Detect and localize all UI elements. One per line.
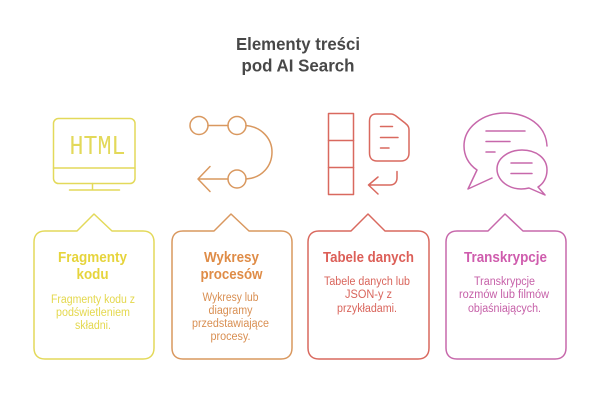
heading: Transkrypcje: Transkrypcje (464, 250, 547, 266)
text: Fragmenty kodu description: składni. (75, 320, 111, 332)
panel: Fragmenty kodu (34, 214, 154, 359)
heading: Wykresy procesów (200, 250, 263, 283)
text: Transkrypcje description: objaśniających. (468, 303, 541, 315)
heading: Fragmenty kodu (58, 250, 127, 283)
text: Transkrypcje description: rozmów lub filmów (459, 289, 550, 301)
heading: Fragmenty kodu: kodu (76, 267, 108, 283)
icon: chat bubbles (464, 113, 547, 195)
text: Transkrypcje description: Transkrypcje (474, 276, 535, 288)
title: Elementy treści (236, 34, 360, 54)
text: Wykresy procesów description (192, 292, 269, 343)
text: Fragmenty kodu description: Fragmenty kodu z (51, 294, 135, 306)
heading: Fragmenty kodu: Fragmenty (58, 250, 127, 266)
text: Tabele danych description: Tabele danych lub (324, 276, 410, 288)
text: Tabele danych description: przykładami. (337, 303, 397, 315)
text: Wykresy procesów description: przedstawiające (192, 318, 269, 330)
panel: Wykresy procesów (172, 214, 292, 359)
text: Tabele danych description: JSON-y z (345, 289, 392, 301)
icon: HTML monitor (54, 118, 135, 190)
text: Wykresy procesów description: procesy. (210, 331, 250, 343)
heading: Tabele danych: Tabele danych (323, 250, 414, 266)
icon: process flow (190, 116, 272, 192)
title (236, 34, 360, 76)
heading: Wykresy procesów: Wykresy (204, 250, 259, 266)
text: Transkrypcje description (459, 276, 550, 315)
icon: HTML monitor: HTML (70, 133, 126, 163)
text: Wykresy procesów description: diagramy (208, 305, 253, 317)
heading: Wykresy procesów: procesów (200, 267, 263, 283)
text: Fragmenty kodu description: podświetleniem (56, 307, 130, 319)
panel: Transkrypcje (446, 214, 566, 359)
text: Wykresy procesów description: Wykresy lub (202, 292, 258, 304)
panel: Tabele danych (308, 214, 429, 359)
icon: table and document (328, 114, 409, 194)
text: Fragmenty kodu description (51, 294, 135, 332)
text: Tabele danych description (324, 276, 410, 315)
title: pod AI Search (242, 56, 354, 76)
